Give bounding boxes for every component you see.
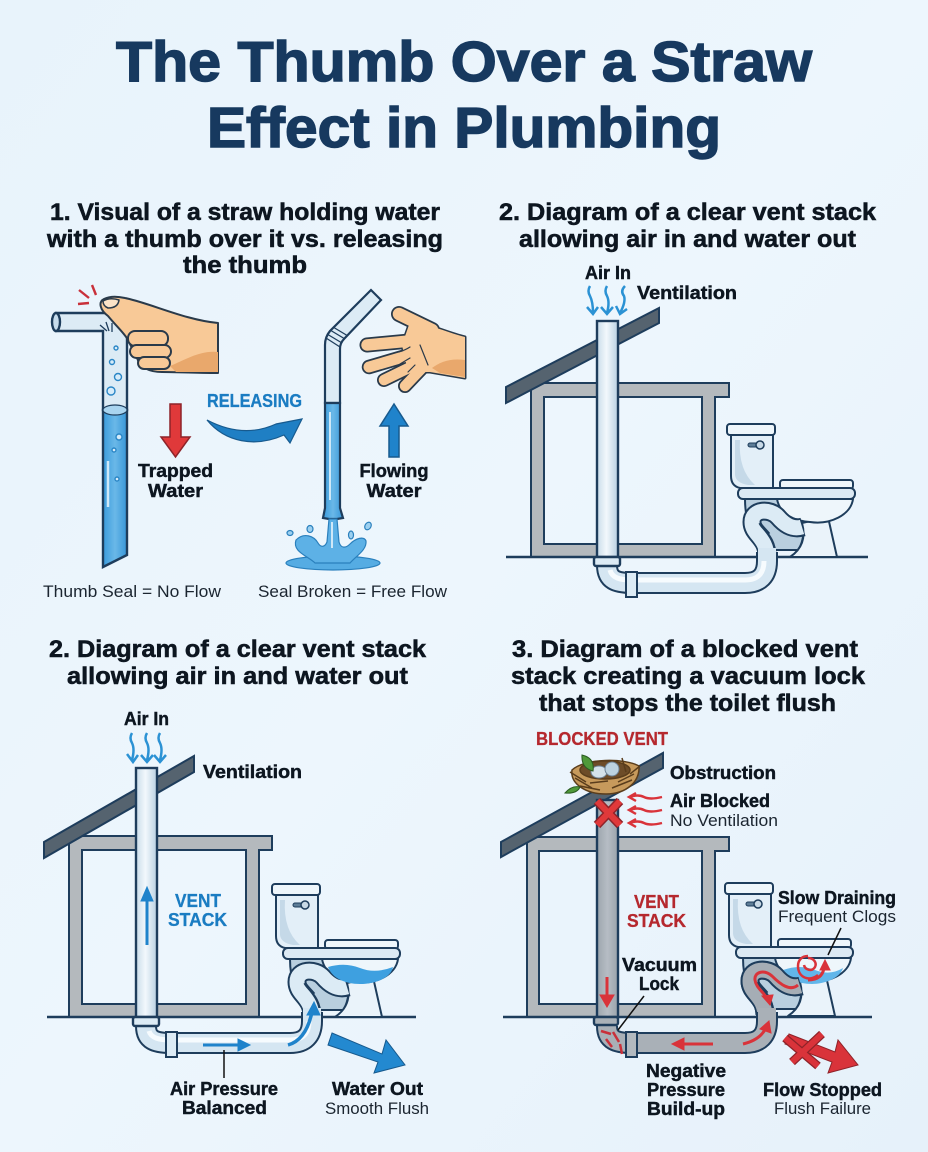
label: trapped water: Trapped — [138, 461, 213, 481]
heading: panel 4: stack creating a vacuum lock — [511, 663, 866, 690]
icon: swirl — [798, 956, 830, 980]
label: air in: Air In — [585, 263, 631, 283]
leader line — [828, 928, 841, 955]
heading: panel 3: allowing air in and water out — [67, 663, 408, 690]
house frame — [531, 383, 729, 557]
label: ventilation: Ventilation — [203, 762, 302, 782]
panel: blocked vent stack — [501, 636, 896, 1119]
panel: clear vent stack (bottom) — [44, 636, 429, 1118]
blocked trap — [750, 970, 801, 1017]
label: ventilation: Ventilation — [637, 283, 737, 303]
icon: x over flow arrow — [785, 1034, 822, 1066]
label: trapped water: Water — [148, 481, 203, 501]
floor line — [503, 1016, 872, 1018]
label: vent stack — [168, 891, 227, 930]
icon: hand pressing thumb — [101, 297, 218, 373]
arrow: air up trap — [288, 1002, 320, 1045]
label: flow stopped: Flush Failure — [774, 1099, 871, 1118]
label: vacuum lock: Lock — [639, 974, 680, 994]
label: vent stack — [627, 892, 686, 931]
label: trapped water — [138, 461, 213, 501]
label: vacuum lock: Vacuum — [622, 955, 697, 975]
label: vent stack: VENT — [634, 892, 679, 912]
icon: pressure marks — [78, 285, 96, 304]
label: air blocked: Air Blocked — [670, 791, 770, 811]
arrow: releasing — [207, 419, 302, 443]
drain pipe — [607, 548, 767, 597]
icon: air in arrows — [587, 286, 627, 314]
floor line — [47, 1016, 416, 1018]
label: slow draining — [778, 888, 896, 926]
drain pipe — [607, 1008, 767, 1057]
label: air pressure balanced: Balanced — [182, 1098, 267, 1118]
label: flow stopped: Flow Stopped — [763, 1080, 882, 1100]
toilet — [725, 883, 853, 1017]
arrow: red through trap — [755, 972, 798, 1005]
arrow: red down vent — [600, 977, 614, 1007]
label: flowing water: Flowing — [360, 461, 428, 481]
vent pipe — [594, 800, 618, 1025]
title: The Thumb Over a Straw — [116, 30, 813, 94]
label: obstruction: Obstruction — [670, 763, 776, 783]
panel: straw and thumb — [43, 199, 465, 601]
heading: panel 4 — [511, 636, 866, 717]
water in bowl — [783, 967, 843, 984]
label: air pressure balanced — [170, 1079, 278, 1118]
arrow: flow stopped — [785, 1034, 858, 1073]
label: vent stack: STACK — [168, 910, 227, 930]
vent pipe — [133, 768, 159, 1026]
label: negative pressure — [646, 1061, 726, 1119]
label: water out: Smooth Flush — [325, 1099, 429, 1118]
panel: clear vent stack (top) — [499, 199, 877, 597]
title — [116, 30, 813, 160]
label: water out: Water Out — [332, 1079, 423, 1099]
label: flow stopped — [763, 1080, 882, 1118]
icon: red x on vent — [597, 801, 620, 825]
label: vent stack: VENT — [175, 891, 221, 911]
roof — [44, 756, 194, 858]
label: slow draining: Slow Draining — [778, 888, 896, 908]
heading: panel 4: 3. Diagram of a blocked vent — [512, 636, 858, 663]
heading: panel 1: 1. Visual of a straw holding water — [50, 199, 440, 226]
label: negative pressure: Negative — [646, 1061, 726, 1081]
heading: panel 1: the thumb — [183, 252, 307, 279]
label: vent stack: STACK — [627, 911, 686, 931]
water in bowl — [328, 965, 393, 984]
heading: panel 2: allowing air in and water out — [519, 226, 856, 253]
label: vacuum lock — [622, 955, 697, 994]
label: flowing water: Water — [366, 481, 422, 501]
label: slow draining: Frequent Clogs — [778, 907, 896, 926]
label: flowing water — [360, 461, 428, 501]
floor line — [506, 556, 868, 558]
label: water out — [325, 1079, 429, 1118]
icon: blocked air arrows — [629, 793, 662, 827]
label: releasing: RELEASING — [207, 391, 302, 411]
arrow: red up riser — [743, 1021, 771, 1044]
label: negative pressure: Pressure — [647, 1080, 725, 1100]
icon: released hand — [367, 314, 465, 386]
caption: seal broken: Seal Broken = Free Flow — [258, 582, 448, 601]
heading: panel 3 — [49, 636, 427, 690]
toilet — [272, 884, 400, 1018]
label: air pressure balanced: Air Pressure — [170, 1079, 278, 1099]
arrow: water out — [328, 1033, 405, 1073]
icon: air in arrows — [127, 733, 166, 762]
house frame — [69, 836, 272, 1017]
vent pipe — [594, 321, 620, 566]
caption: thumb seal: Thumb Seal = No Flow — [43, 582, 222, 601]
arrow: red along drain — [672, 1038, 713, 1050]
label: air blocked: No Ventilation — [670, 811, 778, 830]
arrow: water trapped — [161, 404, 190, 457]
heading: panel 1: with a thumb over it vs. releasing — [46, 226, 443, 253]
icon: splash — [286, 519, 380, 570]
heading: panel 4: that stops the toilet flush — [539, 690, 836, 717]
icon: open straw with flowing water — [323, 290, 381, 519]
roof — [506, 308, 659, 403]
icon: sealed straw with trapped water — [52, 313, 127, 567]
heading: panel 2: 2. Diagram of a clear vent stack — [499, 199, 877, 226]
title: Effect in Plumbing — [207, 96, 721, 160]
arrow: air up vent — [141, 887, 153, 945]
roof — [501, 753, 663, 857]
label: air blocked — [670, 791, 778, 830]
heading: panel 3: 2. Diagram of a clear vent stack — [49, 636, 427, 663]
label: negative pressure: Build-up — [647, 1099, 725, 1119]
icon: bird nest — [565, 755, 640, 794]
arrow: air along drain — [203, 1039, 250, 1051]
drain pipe — [146, 1008, 312, 1057]
label: blocked vent: BLOCKED VENT — [536, 729, 668, 749]
leader line — [618, 996, 644, 1030]
heading: panel 2 — [499, 199, 877, 253]
heading: panel 1 — [46, 199, 443, 279]
toilet — [727, 424, 855, 558]
icon: vacuum cracks — [601, 1031, 622, 1054]
leader line — [223, 1050, 225, 1078]
house frame — [527, 837, 729, 1017]
arrow: water flowing — [380, 404, 408, 457]
label: air in: Air In — [124, 709, 169, 729]
